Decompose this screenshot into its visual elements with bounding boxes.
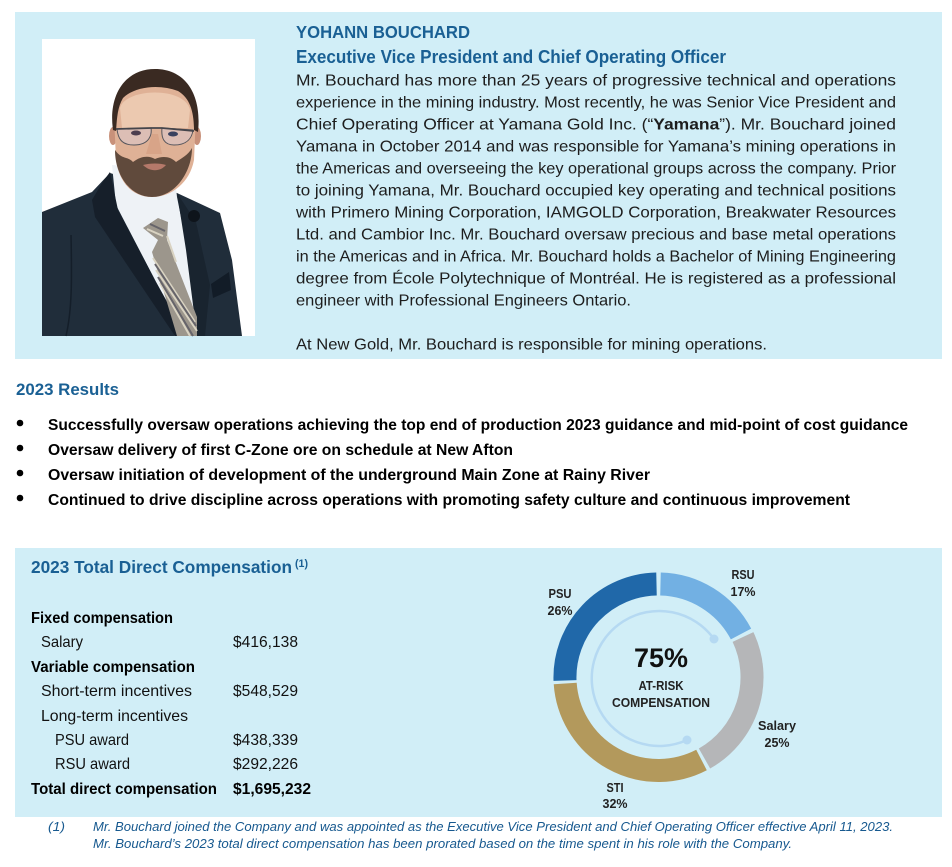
compensation table: $438,339 [233,732,298,749]
job title: Executive Vice President and Chief Operating Officer [296,47,726,67]
compensation table: Salary [41,634,83,651]
results bullet list: Continued to drive discipline across operations with promoting safety culture and continuous improvement [48,492,850,509]
label: RSU: 17% [730,585,756,599]
biography text: experience in the mining industry. Most recently, he was Senior Vice President and [296,94,896,112]
label: PSU [548,587,572,618]
compensation table: Total direct compensation [31,781,217,798]
label: RSU: RSU [732,568,754,582]
heading: 2023 results: 2023 Results [16,380,119,399]
label: RSU [730,568,756,599]
compensation heading: (1) [295,558,308,570]
results bullet list [17,417,908,509]
compensation table: $548,529 [233,683,298,700]
footnote [48,819,893,851]
compensation table: PSU award [55,732,129,749]
segment: Salary 25% [704,637,752,758]
label: Salary [758,719,796,750]
results bullet list: Oversaw initiation of development of the underground Main Zone at Rainy River [48,467,650,484]
donut chart [548,568,796,811]
panel: total direct compensation [15,548,942,817]
segment: PSU 26% [565,584,656,680]
biography text: Ltd. and Cambior Inc. Mr. Bouchard oversaw precious and base metal operations [296,226,896,244]
compensation heading: 2023 Total Direct Compensation [31,557,292,577]
portrait photo [42,39,255,336]
panel: executive biography [15,12,942,359]
biography text: Yamana in October 2014 and was responsible for Yamana’s mining operations in [296,138,896,156]
center value: 75% [634,643,688,673]
label: STI: 32% [602,797,628,811]
compensation table: $292,226 [233,756,298,773]
results bullet list: Oversaw delivery of first C-Zone ore on schedule at New Afton [48,442,513,459]
biography text: At New Gold, Mr. Bouchard is responsible for mining operations. [296,336,767,354]
biography text: with Primero Mining Corporation, IAMGOLD Corporation, Breakwater Resources [295,204,896,222]
biography text: Mr. Bouchard has more than 25 years of progressive technical and operations [296,72,896,90]
compensation table: Fixed compensation [31,610,173,627]
label: PSU: 26% [548,604,572,618]
biography text: the Americas and overseeing the key operational groups across the company. Prior [296,160,897,178]
compensation table: $1,695,232 [233,781,311,798]
biography text [295,72,897,354]
center caption: AT-RISK [638,679,684,693]
name: YOHANN BOUCHARD [296,22,470,42]
footnote: Mr. Bouchard’s 2023 total direct compensation has been prorated based on the time spent in his role with the Company. [93,836,792,851]
segment: RSU 17% [660,584,741,634]
label: Salary: Salary [758,719,796,733]
center caption: COMPENSATION [612,696,710,710]
compensation table: RSU award [55,756,130,773]
center caption [612,679,710,710]
at-risk arc [592,611,718,746]
footnote: Mr. Bouchard joined the Company and was appointed as the Executive Vice President and Chief Operating Officer effective April 11, 2023. [93,819,893,834]
label: PSU: PSU [548,587,572,601]
compensation table: $416,138 [233,634,298,651]
footnote: (1) [48,819,65,834]
biography text: degree from École Polytechnique of Montréal. He is registered as a professional [296,268,896,288]
results bullet list: Successfully oversaw operations achieving the top end of production 2023 guidance and mid-point of cost guidance [48,417,908,434]
compensation table: Short-term incentives [41,683,192,700]
label: STI [602,781,628,811]
segment: STI 32% [565,684,702,770]
biography text: engineer with Professional Engineers Ontario. [296,292,631,310]
compensation table [31,610,311,798]
biography text: to joining Yamana, Mr. Bouchard occupied key operating and technical positions [296,182,896,200]
compensation table: Variable compensation [31,659,195,676]
biography text: Chief Operating Officer at Yamana Gold Inc. (“ Yamana ”). Mr. Bouchard joined [296,116,896,134]
label: Salary: 25% [764,736,790,750]
compensation table: Long-term incentives [41,708,188,725]
label: STI: STI [606,781,624,795]
biography text: in the Americas and in Africa. Mr. Bouchard holds a Bachelor of Mining Engineering [296,248,896,266]
